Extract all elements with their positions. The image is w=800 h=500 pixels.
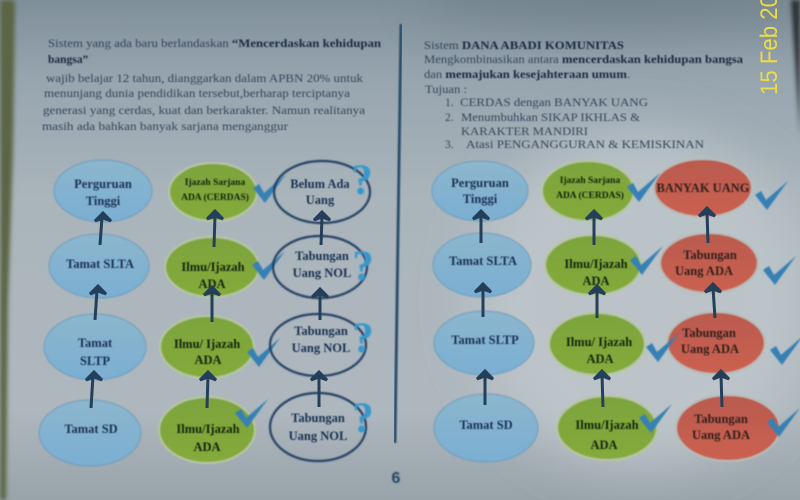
- left text block: wajib belajar 12 tahun, dianggarkan dalam APBN 20% untuk: [46, 73, 363, 85]
- left diagram: savings column: Uang: [306, 193, 335, 207]
- right diagram: knowledge column: ADA (CERDAS): [556, 190, 624, 201]
- right diagram: education column: Tamat SLTA: [449, 254, 517, 268]
- left diagram: knowledge column: Ilmu/Ijazah: [181, 260, 245, 274]
- left diagram: education column: Tinggi: [86, 194, 121, 208]
- right diagram: knowledge column: [542, 161, 657, 460]
- left text block: menunjang dunia pendidikan tersebut,berharap terciptanya: [44, 88, 350, 100]
- right text block: [424, 40, 743, 151]
- page number: 6: [392, 470, 401, 487]
- right text block: Atasi PENGANGGURAN & KEMISKINAN: [466, 139, 705, 151]
- right diagram: knowledge column: ADA: [590, 438, 618, 452]
- center divider: [395, 24, 401, 443]
- left text block: masih ada bahkan banyak sarjana menganggur: [42, 121, 288, 133]
- left diagram: knowledge column: Ijazah Sarjana: [185, 178, 245, 188]
- left diagram: education column: SLTP: [80, 354, 110, 368]
- right diagram: money column: Tabungan: [694, 412, 748, 426]
- left text block: bangsa”: [48, 54, 89, 66]
- right diagram: knowledge column: Ilmu/Ijazah: [564, 257, 628, 271]
- left text block: [42, 38, 382, 133]
- right diagram: money column: Uang ADA: [692, 428, 750, 442]
- right diagram: knowledge column: ADA: [586, 352, 614, 366]
- left question marks: ?: [352, 395, 374, 442]
- left diagram: savings column: Uang NOL: [289, 429, 347, 443]
- left diagram: knowledge column: ADA: [193, 440, 221, 454]
- right text block: 1.: [445, 97, 454, 109]
- left question marks: [351, 157, 374, 442]
- right text block: Menumbuhkan SIKAP IKHLAS &: [461, 112, 640, 124]
- left question marks: ?: [351, 157, 373, 204]
- right diagram: knowledge column: ADA: [582, 274, 610, 288]
- right diagram: money column: [654, 159, 780, 461]
- left diagram: savings column: Uang NOL: [292, 341, 350, 355]
- left question marks: ?: [352, 243, 374, 290]
- right text block: Sistem DANA ABADI KOMUNITAS: [424, 40, 624, 52]
- left diagram: knowledge column: Ilmu/ Ijazah: [174, 337, 240, 351]
- left text block: Sistem yang ada baru berlandaskan “Mencerdaskan kehidupan: [48, 38, 382, 50]
- left diagram: savings column: Belum Ada: [290, 177, 350, 191]
- left text block: generasi yang cerdas, kuat dan berkarakter. Namun realitanya: [43, 105, 365, 117]
- right diagram: money column: Tabungan: [682, 326, 736, 340]
- left diagram: savings column: Tabungan: [294, 324, 348, 338]
- right text block: 3.: [445, 139, 454, 151]
- right diagram: education column: [432, 161, 538, 462]
- right checks: [627, 173, 800, 437]
- right text block: Tujuan :: [425, 84, 467, 96]
- left diagram: savings column: Tabungan: [295, 249, 349, 263]
- right diagram: education column: Tamat SD: [459, 418, 513, 432]
- left question marks: ?: [352, 315, 374, 362]
- left diagram: knowledge column: ADA: [198, 277, 226, 291]
- right diagram: money column: Uang ADA: [681, 342, 739, 356]
- left diagram: knowledge column: ADA: [194, 353, 222, 367]
- left diagram: education column: Tamat SD: [64, 422, 118, 436]
- right diagram: education column: Perguruan: [451, 176, 509, 190]
- left diagram: savings column: Tabungan: [291, 411, 345, 425]
- right diagram: education column: Tamat SLTP: [451, 333, 519, 347]
- right text block: dan memajukan kesejahteraan umum .: [424, 69, 630, 81]
- right text block: 2.: [445, 112, 454, 124]
- right diagram: money column: Tabungan: [683, 248, 737, 262]
- right diagram: money column: BANYAK UANG: [657, 181, 750, 195]
- left diagram: savings column: [270, 161, 370, 461]
- right diagram: money column: Uang ADA: [675, 264, 733, 278]
- left diagram: education column: Tamat: [78, 336, 113, 350]
- left diagram: education column: Tamat SLTA: [66, 257, 134, 271]
- left diagram: savings column: Uang NOL: [293, 266, 351, 280]
- right diagram: education column: Tinggi: [463, 192, 498, 206]
- left diagram: knowledge column: ADA (CERDAS): [181, 192, 249, 203]
- right diagram: knowledge column: Ilmu/ Ijazah: [566, 335, 632, 349]
- left diagram: education column: Perguruan: [74, 177, 132, 191]
- right diagram: knowledge column: Ijazah Sarjana: [560, 176, 620, 186]
- right text block: CERDAS dengan BANYAK UANG: [460, 97, 648, 109]
- left diagram: knowledge column: Ilmu/Ijazah: [176, 422, 240, 436]
- right text block: KARAKTER MANDIRI: [461, 126, 588, 138]
- left checks: [235, 174, 286, 428]
- right text block: Mengkombinasikan antara mencerdaskan kehidupan bangsa: [424, 54, 743, 66]
- left diagram: education column: [39, 160, 152, 466]
- left diagram: knowledge column: [159, 163, 259, 463]
- right diagram: knowledge column: Ilmu/Ijazah: [575, 418, 639, 432]
